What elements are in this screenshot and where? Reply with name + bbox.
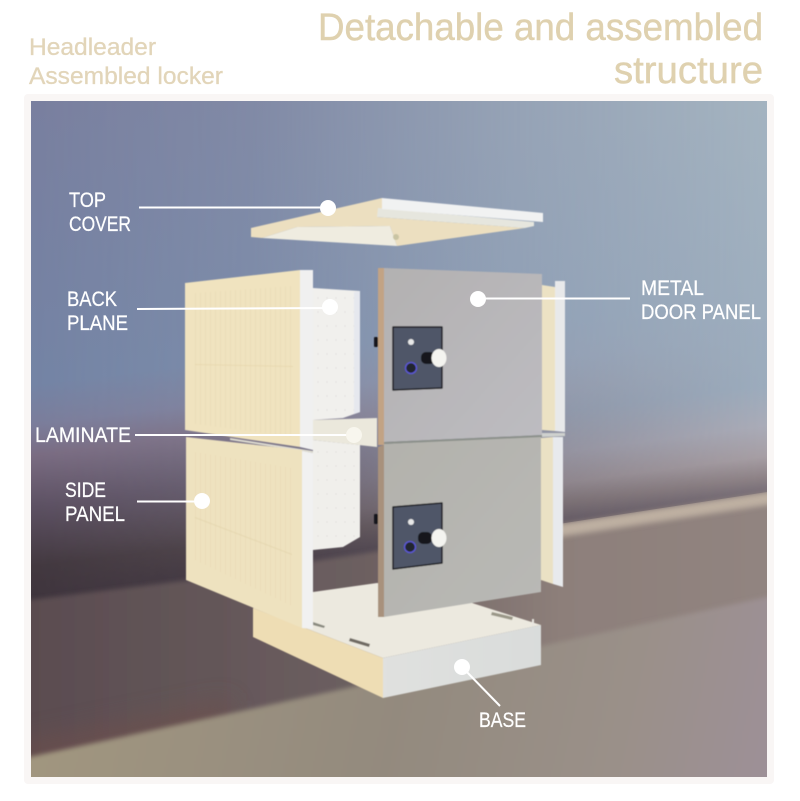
callout: top cover (69, 189, 336, 236)
metal door panel upper (378, 268, 542, 445)
back plane upper (313, 288, 360, 420)
callout: metal door panel (470, 277, 761, 324)
callout: side panel: SIDE (65, 479, 106, 502)
title: structure (614, 50, 763, 92)
callout: back plane: PLANE (67, 312, 128, 335)
top cover (251, 198, 543, 246)
locker exploded diagram (185, 198, 565, 698)
door latches (374, 337, 378, 524)
side panel upper (185, 270, 313, 450)
callout: base: BASE (479, 709, 526, 732)
callout: side panel: PANEL (65, 503, 125, 526)
title: Detachable and assembled (318, 7, 763, 49)
callout: metal door panel: DOOR PANEL (641, 301, 761, 324)
callout: metal door panel: METAL (641, 277, 704, 300)
callout: laminate (35, 424, 362, 447)
laminate (230, 418, 377, 453)
side panel lower (186, 437, 313, 629)
callout: top cover: COVER (69, 213, 131, 236)
title (318, 7, 763, 92)
brand subtitle (29, 34, 223, 90)
brand subtitle: Headleader (29, 34, 156, 61)
back plane lower (313, 440, 360, 550)
callout: back plane: BACK (67, 288, 117, 311)
base (253, 583, 541, 698)
callout: top cover: TOP (69, 189, 106, 212)
side panel right (541, 281, 565, 587)
smart lock lower (393, 503, 446, 569)
callout: laminate: LAMINATE (35, 424, 131, 447)
callout: base (454, 659, 526, 732)
brand subtitle: Assembled locker (29, 63, 223, 90)
metal door panel lower (378, 435, 542, 617)
callout: side panel (65, 479, 210, 526)
callout: back plane (67, 288, 338, 335)
smart lock upper (393, 327, 446, 390)
